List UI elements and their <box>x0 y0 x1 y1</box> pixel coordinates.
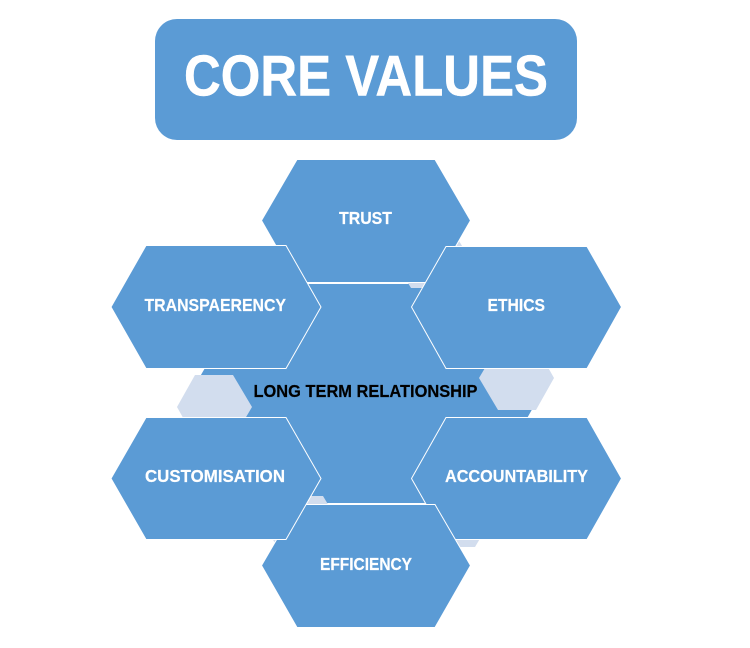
hexagon: transparency <box>111 246 321 368</box>
hexagon: trust <box>262 160 470 282</box>
hexagon: accountability: ACCOUNTABILITY <box>445 466 588 486</box>
central label: LONG TERM RELATIONSHIP <box>254 381 478 401</box>
decorative light hexagons <box>177 224 554 560</box>
hexagon: accountability <box>412 418 622 540</box>
hexagon: trust: TRUST <box>339 208 392 228</box>
central hexagon: long term relationship <box>190 284 542 504</box>
title banner: CORE VALUES <box>184 44 548 108</box>
hexagon: transparency: TRANSPAERENCY <box>144 295 286 315</box>
hexagon: efficiency: EFFICIENCY <box>320 554 412 574</box>
title banner <box>155 19 577 140</box>
hexagon: customisation: CUSTOMISATION <box>145 466 285 486</box>
hexagon: ethics <box>412 246 622 368</box>
hexagon: customisation <box>111 418 321 540</box>
hexagon: efficiency <box>262 504 470 628</box>
hexagon: ethics: ETHICS <box>488 295 545 315</box>
